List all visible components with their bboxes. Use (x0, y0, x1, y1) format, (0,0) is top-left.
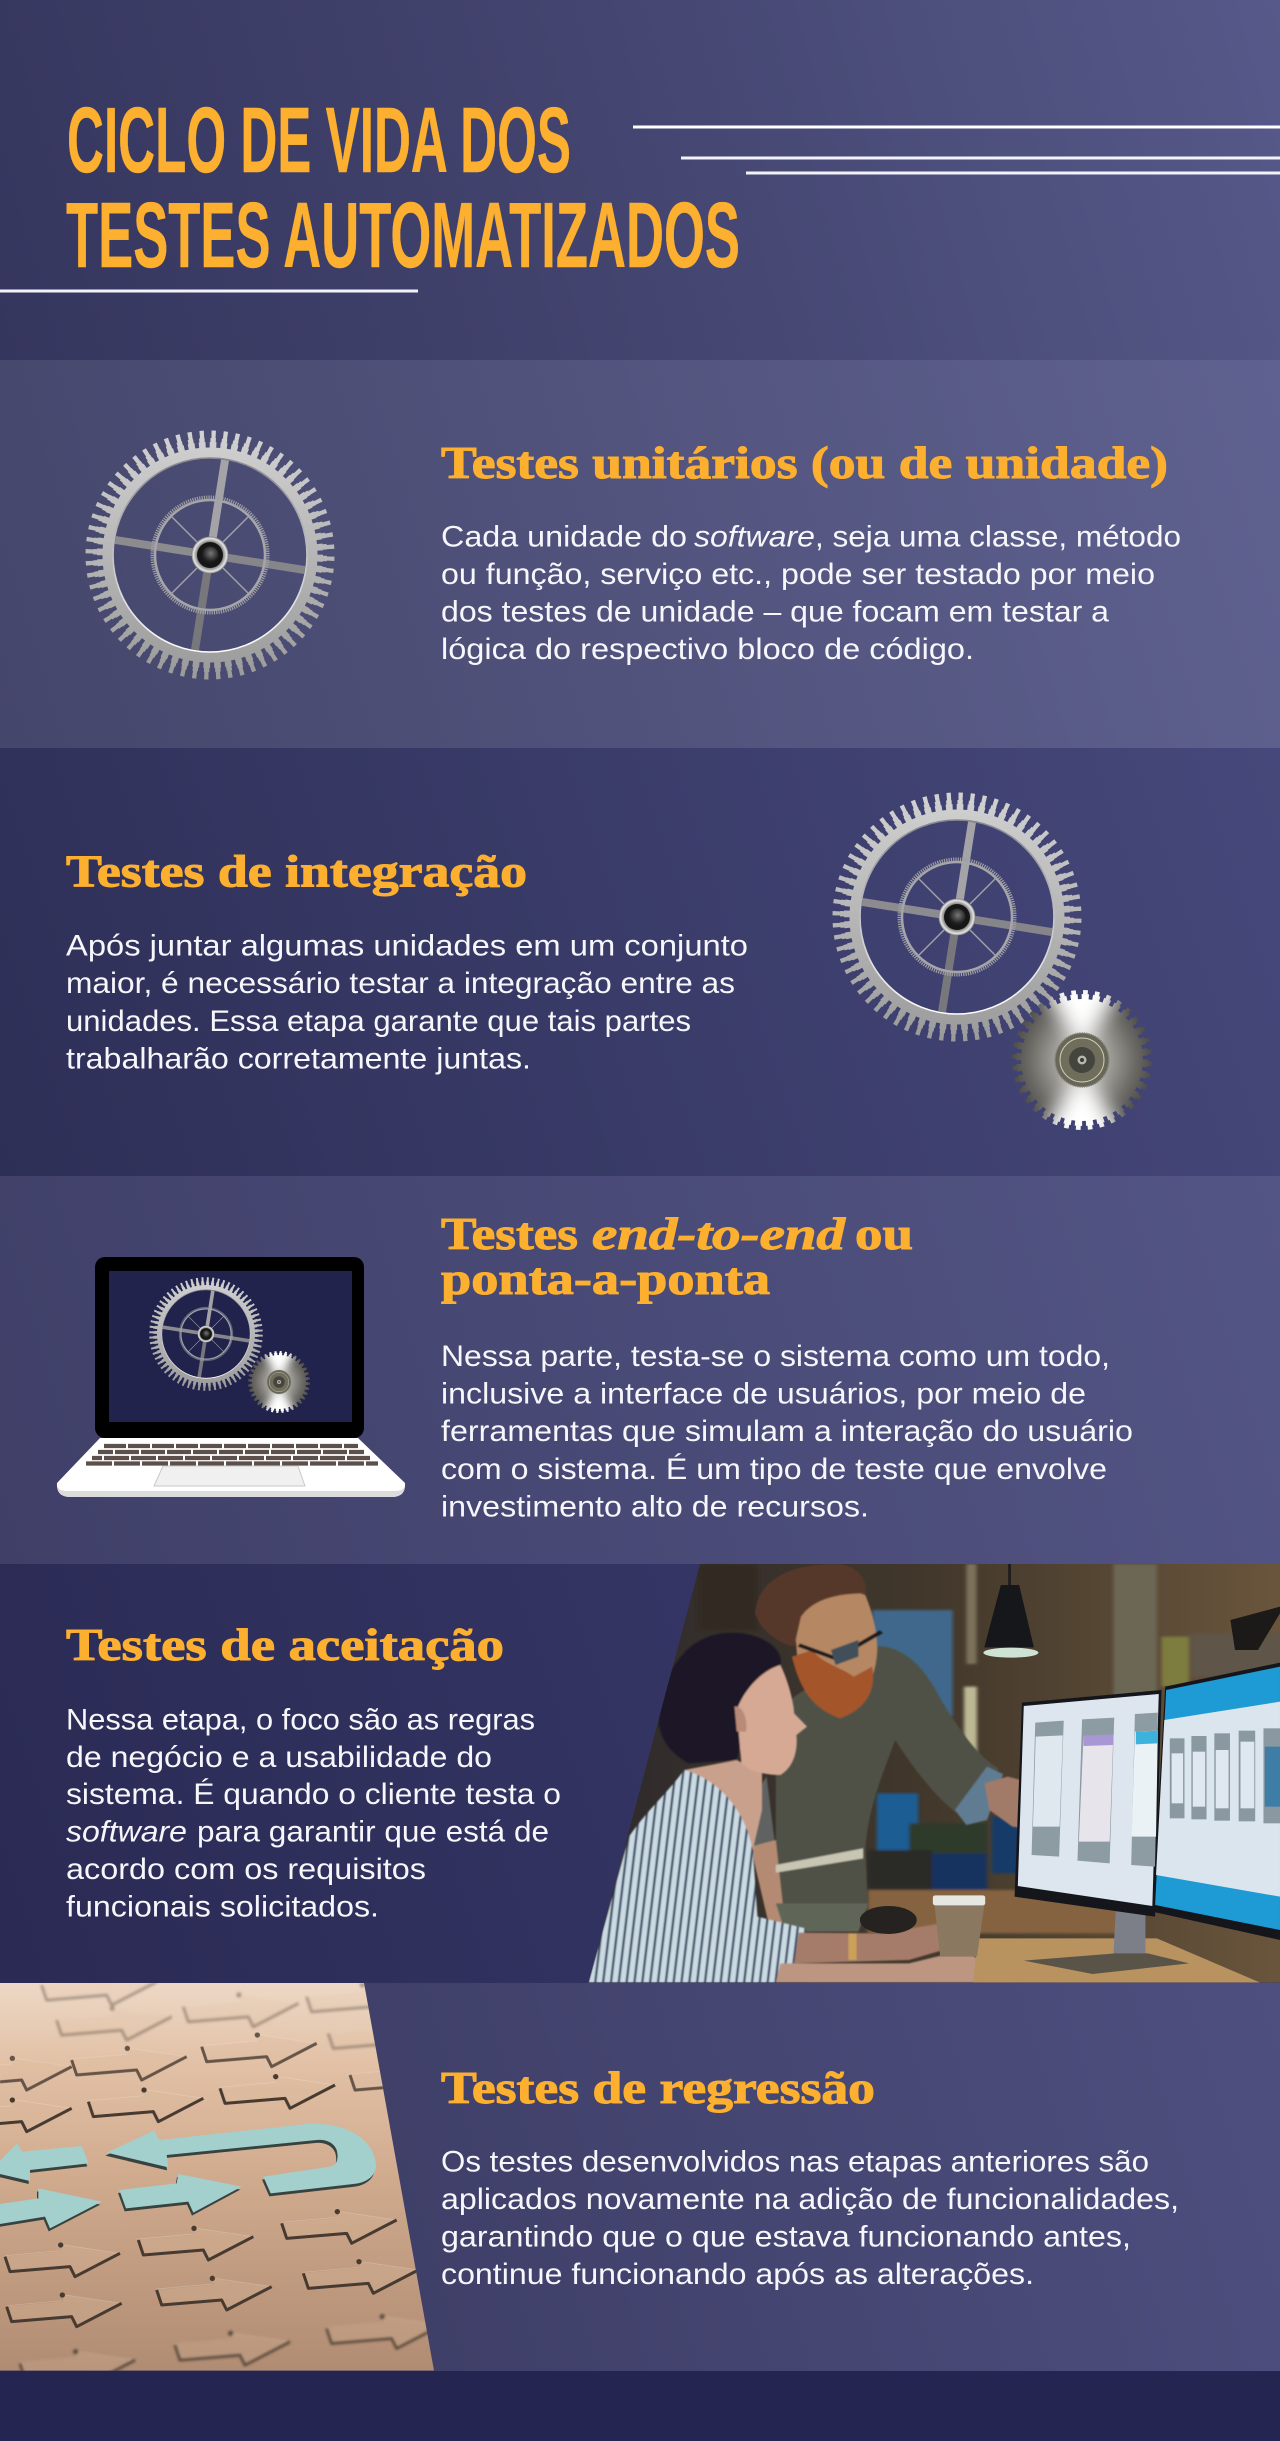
text: testes de aceitação: Nessa etapa, o foco são as regras (66, 1704, 535, 1736)
heading: testes end-to-end: ou (855, 1209, 913, 1259)
text: testes end-to-end: investimento alto de recursos. (441, 1490, 869, 1524)
text: testes de aceitação: software (66, 1816, 187, 1848)
text: testes de integração: Após juntar algumas unidades em um conjunto (66, 930, 748, 962)
text: testes unitários: Cada unidade do (441, 520, 687, 554)
text: testes de regressão: Os testes desenvolvidos nas etapas anteriores são (441, 2146, 1149, 2178)
panel: header (0, 0, 1280, 360)
panel: testes unitários (0, 360, 1280, 748)
text: testes de aceitação: de negócio e a usabilidade do (66, 1741, 492, 1774)
title: CICLO DE VIDA DOS (67, 88, 571, 192)
text: testes end-to-end: inclusive a interface de usuários, por meio de (441, 1378, 1086, 1410)
text: testes unitários (441, 520, 1181, 666)
icon: gears (837, 797, 1157, 1145)
text: testes end-to-end: com o sistema. É um tipo de teste que envolve (441, 1453, 1107, 1486)
text: testes end-to-end: ferramentas que simulam a interação do usuário (441, 1415, 1133, 1448)
panel: testes de aceitação (0, 1550, 1280, 2000)
icon: gear (90, 435, 330, 675)
text: testes unitários: , seja uma classe, método (815, 520, 1181, 554)
image: kraft paper arrows (0, 1983, 434, 2371)
heading: testes end-to-end: Testes (441, 1209, 578, 1259)
lamp (983, 1564, 1038, 1658)
heading: testes end-to-end (441, 1209, 913, 1304)
panel: testes end-to-end (0, 1176, 1280, 1564)
text: testes de aceitação (66, 1704, 561, 1924)
teal arrows (0, 2124, 376, 2231)
text: testes de aceitação: acordo com os requisitos (66, 1853, 426, 1886)
monitors (1015, 1663, 1280, 1940)
text: testes unitários: ou função, serviço etc., pode ser testado por meio (441, 558, 1155, 591)
text: testes unitários: lógica do respectivo bloco de código. (441, 633, 974, 666)
desk and coffee (860, 1895, 1260, 1983)
text: testes end-to-end: Nessa parte, testa-se o sistema como um todo, (441, 1340, 1110, 1373)
text: testes de integração: unidades. Essa etapa garante que tais partes (66, 1005, 691, 1038)
footer band (0, 2371, 1280, 2441)
woman (588, 1633, 1015, 1983)
heading: testes de regressão: Testes de regressão (441, 2063, 875, 2113)
image: developers at monitors (588, 1564, 1280, 1982)
title: TESTES AUTOMATIZADOS (66, 183, 740, 287)
text: testes de aceitação: funcionais solicitados. (66, 1890, 379, 1924)
heading: testes unitários: Testes unitários (ou de unidade) (441, 438, 1168, 488)
text: testes de aceitação: para garantir que está de (197, 1816, 549, 1848)
text: testes de regressão: garantindo que o que estava funcionando antes, (441, 2220, 1131, 2254)
title (66, 88, 740, 287)
man (752, 1564, 1019, 1932)
text: testes de regressão (441, 2146, 1179, 2291)
icon: laptop with gears (57, 1257, 405, 1497)
text: testes unitários: dos testes de unidade – que focam em testar a (441, 596, 1109, 628)
text: testes de integração: maior, é necessário testar a integração entre as (66, 967, 735, 1000)
heading: testes end-to-end: end-to-end (592, 1209, 847, 1259)
panel: testes de integração (0, 748, 1280, 1176)
heading: testes de aceitação: Testes de aceitação (66, 1620, 504, 1670)
text: testes de regressão: aplicados novamente na adição de funcionalidades, (441, 2183, 1179, 2216)
text: testes end-to-end (441, 1340, 1133, 1524)
text: testes de integração: trabalharão corretamente juntas. (66, 1042, 531, 1076)
heading: testes de integração: Testes de integração (66, 846, 527, 896)
panel: testes de regressão (0, 1970, 1280, 2390)
text: testes de integração (66, 930, 748, 1076)
text: testes unitários: software (694, 520, 815, 554)
heading: testes end-to-end: ponta-a-ponta (441, 1254, 770, 1304)
text: testes de regressão: continue funcionando após as alterações. (441, 2258, 1034, 2291)
text: testes de aceitação: sistema. É quando o cliente testa o (66, 1778, 561, 1811)
